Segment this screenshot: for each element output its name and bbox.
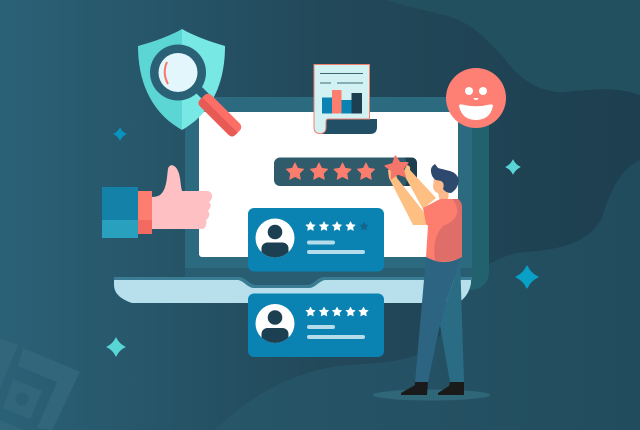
smiley edge shade [455, 77, 506, 128]
empty star [359, 222, 369, 231]
neck and face [433, 176, 449, 201]
rating bar body [274, 158, 417, 186]
smiley mouth [459, 104, 493, 120]
card stars [306, 307, 368, 316]
avatar [256, 218, 294, 258]
shield left half [138, 29, 182, 130]
card body [248, 208, 384, 272]
rating bar [274, 158, 417, 186]
shield with magnifier [138, 29, 243, 138]
background blob: top right [385, 0, 640, 95]
person placing star [373, 155, 490, 400]
sparkle: teal right [506, 160, 520, 174]
laptop: white screen [199, 112, 458, 257]
lens highlight [165, 62, 168, 84]
smiley face fill [446, 68, 506, 128]
pants left leg [415, 257, 460, 382]
shirt shade [434, 199, 462, 262]
avatar [256, 304, 294, 343]
cuff [138, 191, 152, 220]
review card one [248, 208, 384, 272]
card text lines [307, 325, 365, 339]
magnifier neck [196, 87, 212, 103]
ground shadow [373, 390, 490, 400]
laptop: base rim [114, 277, 472, 288]
sparkle: large blue [516, 266, 538, 288]
magnifier handle [197, 92, 243, 138]
shirt [423, 199, 462, 262]
bar chart [322, 90, 362, 114]
cuff lower [138, 220, 152, 234]
document scroll foot [322, 119, 377, 134]
near arm [388, 169, 430, 225]
laptop [114, 97, 489, 303]
sleeve [102, 187, 138, 220]
pants right leg [440, 257, 464, 382]
magnifier ring [150, 44, 206, 100]
handle shade [197, 97, 238, 138]
right shoe [438, 382, 464, 395]
laptop: right dark bezel [460, 97, 489, 290]
thumbs up hand [102, 165, 212, 238]
hair [431, 164, 459, 193]
sparkle: teal left [107, 338, 125, 356]
big star [384, 155, 410, 179]
rating stars [286, 163, 375, 179]
laptop: screen bezel [185, 97, 472, 268]
document page [314, 64, 370, 134]
card body [248, 294, 384, 357]
leg shadow [428, 325, 440, 365]
hand [152, 165, 212, 229]
laptop: base [114, 277, 471, 303]
left shoe [401, 382, 428, 395]
background blob: bottom [215, 160, 640, 430]
card text lines [307, 240, 365, 254]
laptop: hinge with notch [185, 268, 472, 287]
smiley face [446, 68, 506, 128]
watermark logo [0, 338, 80, 430]
card stars [306, 222, 355, 231]
document with chart [314, 64, 377, 134]
magnifier lens [158, 53, 198, 92]
smiley nose [474, 98, 478, 100]
shield right half [182, 29, 225, 130]
review card two [248, 294, 384, 357]
sparkle: small blue [114, 128, 126, 140]
document text lines [320, 73, 363, 84]
rating bar end [405, 158, 417, 186]
smiley eyes [465, 87, 473, 95]
sleeve lower [102, 220, 138, 238]
far arm [403, 165, 436, 209]
